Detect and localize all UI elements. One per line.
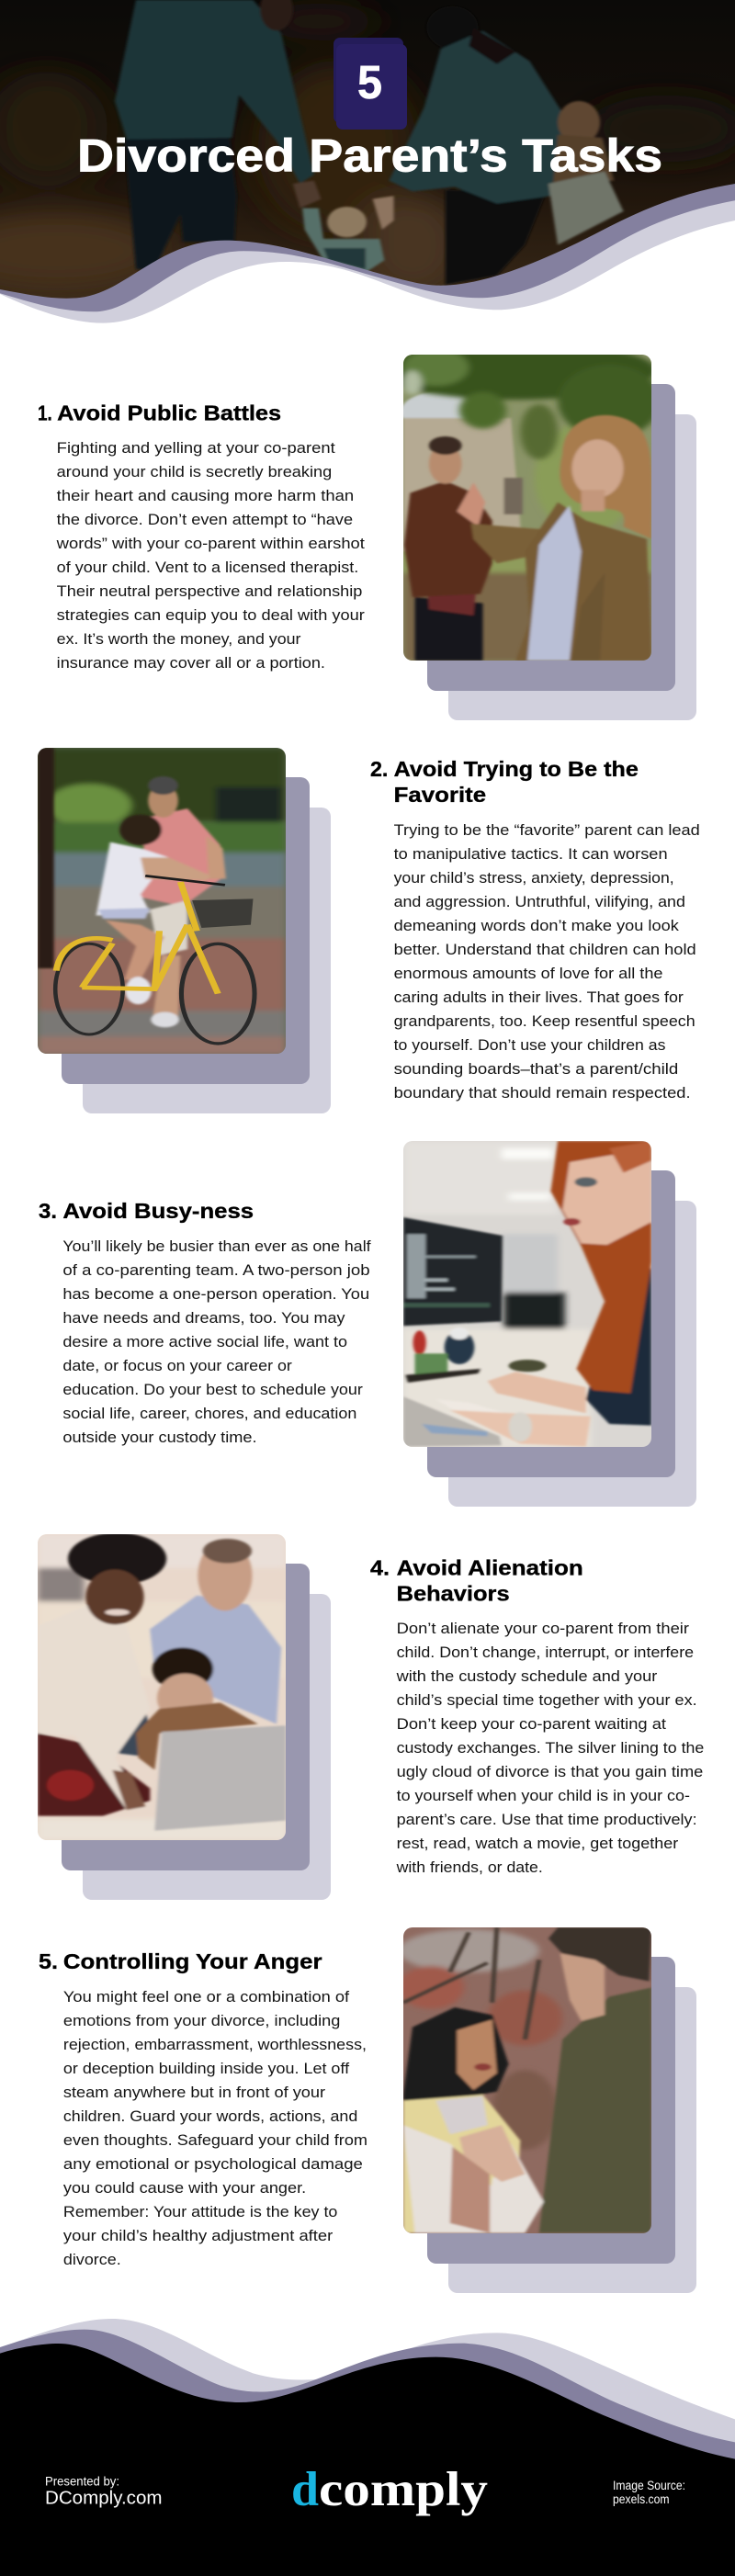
logo: dcomply: d bbox=[291, 2463, 319, 2516]
body text 5: or deception building inside you. Let off bbox=[63, 2061, 350, 2077]
body text 5: steam anywhere but in front of your bbox=[63, 2085, 326, 2101]
body text 3: education. Do your best to schedule your bbox=[62, 1382, 363, 1398]
card stack 4 bbox=[62, 1564, 331, 1900]
body text 4: parent’s care. Use that time productively: bbox=[397, 1812, 697, 1828]
body text 5: even thoughts. Safeguard your child from bbox=[63, 2132, 368, 2149]
footer bbox=[0, 2319, 735, 2576]
photo: family with laptop bbox=[38, 1532, 286, 1840]
body text 1: the divorce. Don’t even attempt to “have bbox=[57, 512, 353, 528]
body text 1: strategies can equip you to deal with your bbox=[57, 607, 365, 624]
body text 3: date, or focus on your career or bbox=[62, 1358, 292, 1374]
body text 5: any emotional or psychological damage bbox=[63, 2156, 363, 2173]
heading 5: 5. bbox=[39, 1949, 58, 1973]
body text 4: custody exchanges. The silver lining to the bbox=[397, 1740, 704, 1757]
card stack 5 bbox=[427, 1957, 696, 2293]
body text 3: outside your custody time. bbox=[62, 1429, 257, 1446]
body text 2: better. Understand that children can hold bbox=[394, 942, 696, 958]
heading 4: Behaviors bbox=[397, 1582, 510, 1606]
body text 2: to manipulative tactics. It can worsen bbox=[394, 846, 668, 863]
body text 5 bbox=[63, 1989, 368, 2268]
body text 4: with friends, or date. bbox=[396, 1859, 543, 1876]
heading 4 bbox=[370, 1556, 583, 1606]
presented by bbox=[45, 2475, 162, 2508]
body text 1: of your child. Vent to a licensed therapist. bbox=[57, 559, 358, 576]
photo: woman talking to man bbox=[399, 1927, 651, 2233]
image source: Image Source: bbox=[613, 2479, 685, 2492]
body text 2: and aggression. Untruthful, vilifying, and bbox=[394, 894, 685, 910]
title: Divorced Parent’s Tasks bbox=[77, 130, 662, 182]
section 3: Avoid Busy-ness bbox=[39, 1141, 696, 1507]
body text 4: ugly cloud of divorce is that you gain time bbox=[397, 1764, 703, 1780]
body text 5: children. Guard your words, actions, and bbox=[63, 2108, 357, 2125]
body text 2: Trying to be the “favorite” parent can lead bbox=[394, 822, 700, 839]
body text 2: caring adults in their lives. That goes for bbox=[394, 989, 684, 1006]
heading 4: Avoid Alienation bbox=[397, 1556, 583, 1580]
presented by: Presented by: bbox=[45, 2475, 119, 2488]
card stack 3 bbox=[427, 1170, 696, 1507]
number badge: 5 bbox=[357, 56, 382, 108]
body text 2: sounding boards–that’s a parent/child bbox=[394, 1061, 678, 1078]
body text 1: Fighting and yelling at your co-parent bbox=[57, 440, 335, 457]
wave: white layer bbox=[0, 220, 735, 343]
image source: pexels.com bbox=[613, 2492, 669, 2506]
logo: dcomply: comply bbox=[319, 2463, 488, 2516]
body text 2: your child’s stress, anxiety, depression, bbox=[394, 870, 674, 887]
heading 3: 3. bbox=[39, 1199, 57, 1223]
body text 5: rejection, embarrassment, worthlessness, bbox=[63, 2037, 367, 2053]
body text 2: to yourself. Don’t use your children as bbox=[394, 1037, 665, 1054]
header banner bbox=[0, 0, 735, 343]
footer wave: light layer bbox=[0, 2319, 735, 2576]
body text 2 bbox=[394, 822, 700, 1102]
heading 2: 2. bbox=[370, 757, 388, 781]
presented by: DComply.com bbox=[45, 2488, 162, 2508]
body text 4: Don’t keep your co-parent waiting at bbox=[397, 1716, 666, 1733]
body text 1: Their neutral perspective and relationship bbox=[57, 583, 362, 600]
photo: couple arguing bbox=[403, 355, 651, 661]
body text 1: around your child is secretly breaking bbox=[57, 464, 332, 480]
body text 4: child. Don’t change, interrupt, or interfere bbox=[397, 1644, 694, 1661]
body text 4 bbox=[395, 1621, 704, 1876]
body text 5: your child’s healthy adjustment after bbox=[63, 2228, 334, 2244]
body text 3 bbox=[62, 1238, 371, 1446]
heading 4: 4. bbox=[370, 1556, 390, 1580]
body text 5: You might feel one or a combination of bbox=[63, 1989, 350, 2005]
body text 4: rest, read, watch a movie, get together bbox=[397, 1836, 679, 1852]
body text 1 bbox=[56, 440, 365, 672]
body text 5: Remember: Your attitude is the key to bbox=[63, 2204, 337, 2220]
footer black block bbox=[0, 2344, 735, 2576]
body text 3: desire a more active social life, want to bbox=[62, 1334, 347, 1350]
body text 3: has become a one-person operation. You bbox=[62, 1286, 369, 1303]
wave: light layer bbox=[0, 200, 735, 337]
body text 1: insurance may cover all or a portion. bbox=[57, 655, 325, 672]
card stack 2 bbox=[62, 777, 331, 1113]
body text 4: Don’t alienate your co-parent from their bbox=[397, 1621, 690, 1637]
body text 5: you could cause with your anger. bbox=[63, 2180, 306, 2197]
photo: father and daughter on bicycle bbox=[38, 748, 286, 1055]
heading 1: Avoid Public Battles bbox=[57, 401, 281, 424]
card stack 1 bbox=[427, 384, 696, 720]
body text 2: enormous amounts of love for all the bbox=[394, 966, 663, 982]
body text 2: boundary that should remain respected. bbox=[394, 1085, 691, 1102]
section 4: Avoid Alienation Behaviors bbox=[38, 1532, 704, 1900]
body text 4: with the custody schedule and your bbox=[395, 1668, 658, 1685]
wave: mid layer bbox=[0, 184, 735, 337]
photo: woman at computer bbox=[403, 1141, 651, 1449]
section 1: Avoid Public Battles bbox=[38, 342, 696, 720]
heading 1: 1. bbox=[38, 401, 52, 424]
body text 1: their heart and causing more harm than bbox=[57, 488, 354, 504]
body text 3: of a co-parenting team. A two-person job bbox=[62, 1262, 370, 1279]
image source bbox=[613, 2479, 685, 2506]
body text 2: grandparents, too. Keep resentful speech bbox=[394, 1013, 695, 1030]
section 2: Avoid Trying to Be the Favorite bbox=[38, 748, 700, 1113]
body text 3: You’ll likely be busier than ever as one half bbox=[62, 1238, 371, 1255]
body text 4: child’s special time together with your ex. bbox=[397, 1692, 697, 1709]
heading 2: Favorite bbox=[394, 783, 486, 807]
heading 2 bbox=[370, 757, 639, 807]
heading 5: Controlling Your Anger bbox=[63, 1949, 322, 1973]
heading 3: Avoid Busy-ness bbox=[62, 1199, 254, 1223]
section 5: Controlling Your Anger bbox=[39, 1927, 696, 2293]
body text 2: demeaning words don’t make you look bbox=[394, 918, 680, 934]
heading 2: Avoid Trying to Be the bbox=[394, 757, 639, 781]
number badge bbox=[334, 38, 407, 130]
hero photo: family walking bbox=[0, 0, 735, 331]
body text 3: have needs and dreams, too. You may bbox=[62, 1310, 345, 1327]
body text 4: to yourself when your child is in your co- bbox=[397, 1788, 690, 1804]
body text 1: ex. It’s worth the money, and your bbox=[57, 631, 301, 648]
body text 5: divorce. bbox=[63, 2252, 121, 2268]
body text 1: words” with your co-parent within earshot bbox=[56, 536, 365, 552]
footer wave: mid layer bbox=[0, 2330, 735, 2576]
body text 5: emotions from your divorce, including bbox=[63, 2013, 340, 2029]
body text 3: social life, career, chores, and education bbox=[62, 1406, 356, 1422]
